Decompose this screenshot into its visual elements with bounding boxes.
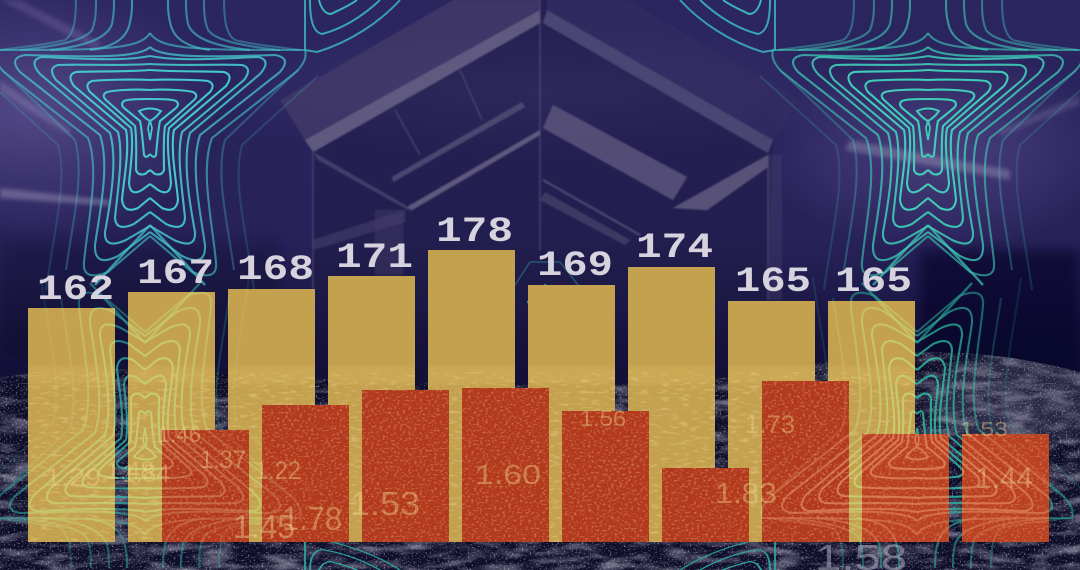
- red bars: [162, 381, 1049, 542]
- value labels: 168: [237, 250, 314, 290]
- faded overlay numbers: 1.78: [282, 500, 342, 537]
- faded overlay numbers: [45, 406, 1033, 570]
- contour star: lower right: [749, 278, 1080, 568]
- faded overlay numbers: 1.45: [233, 508, 295, 545]
- faded overlay numbers: 1.37: [200, 446, 246, 474]
- contour corner: top right: [680, 0, 775, 52]
- value labels: [37, 212, 912, 310]
- faded overlay numbers: 1.83: [715, 478, 777, 510]
- faded overlay numbers: 1.56: [580, 406, 626, 431]
- contour star: upper left: [0, 0, 318, 290]
- faded overlay numbers: 1.84: [122, 460, 170, 488]
- value labels: 178: [436, 212, 513, 252]
- contour corner: bottom right: [680, 539, 775, 570]
- gold bars: [28, 250, 915, 542]
- value labels: 171: [336, 238, 413, 278]
- faded overlay numbers: 1.22: [255, 457, 301, 485]
- value labels: 174: [636, 228, 713, 268]
- hexagonal beam structure: [280, 0, 800, 300]
- value labels: 167: [137, 254, 214, 294]
- gold bar texture: [28, 292, 915, 542]
- faded overlay numbers: 1.44: [975, 462, 1033, 495]
- faded overlay numbers: 1.60: [475, 459, 541, 490]
- value labels: 162: [37, 270, 114, 310]
- faded overlay numbers: 1.53: [960, 419, 1008, 441]
- data field texture: [0, 340, 1080, 570]
- faded overlay numbers: 1.48: [106, 457, 154, 485]
- contour corner: bottom left: [305, 539, 400, 570]
- value labels: 169: [537, 246, 613, 286]
- value labels: 165: [735, 262, 811, 302]
- contour star: upper right: [760, 0, 1080, 290]
- red bar texture: [162, 381, 1049, 542]
- faded overlay numbers: 1.29: [45, 464, 101, 492]
- faded overlay numbers: 1.53: [350, 485, 420, 522]
- small center emblem: [515, 262, 578, 305]
- faded overlay numbers: 1.46: [158, 422, 201, 447]
- contour corner: top left: [305, 0, 400, 52]
- value labels: 165: [835, 262, 912, 302]
- faded overlay numbers: 1.73: [745, 411, 795, 439]
- contour star: lower left: [0, 278, 313, 568]
